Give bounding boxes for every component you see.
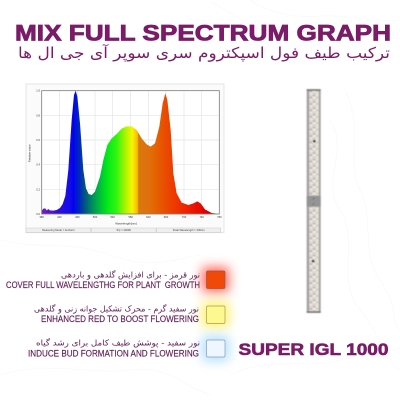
chart footer boxes: Tcp = 4000K xyxy=(116,228,131,232)
legend: red light: COVER FULL WAVELENGTHG FOR PLANT GROWTH xyxy=(6,280,200,290)
x axis labels: 420 xyxy=(57,215,62,219)
y axis title: Relative value xyxy=(28,144,32,162)
legend: red light: نور قرمز - برای افزایش گلدهی و باردهی xyxy=(61,270,200,280)
x axis labels xyxy=(39,215,222,219)
y axis labels: 0.8 xyxy=(36,113,41,117)
x axis labels: 740 xyxy=(199,215,204,219)
product name: SUPER IGL 1000 xyxy=(238,340,388,359)
y axis labels: 0.6 xyxy=(36,138,41,142)
legend: warm white light: نور سفید گرم - محرک تشکیل جوانه زنی و گلدهی xyxy=(34,304,199,314)
chart footer boxes xyxy=(26,228,221,232)
subtitle in Persian: ترکیب طیف فول اسپکتروم سری سوپر آی جی ال ها xyxy=(18,44,390,63)
x axis labels: 580 xyxy=(128,215,133,219)
panel: spectrum chart xyxy=(26,84,224,233)
chart footer boxes: Peak Wavelength = 436nm xyxy=(173,228,205,232)
x axis labels: 780 xyxy=(217,215,222,219)
x axis labels: 540 xyxy=(110,215,115,219)
x axis labels: 700 xyxy=(182,215,187,219)
legend: white light: INDUCE BUD FORMATION AND FLOWERING xyxy=(28,349,199,359)
LED light bar xyxy=(307,89,321,313)
x axis labels: 460 xyxy=(75,215,80,219)
y axis labels xyxy=(36,89,41,216)
y axis labels: 0.0 xyxy=(36,212,41,216)
legend: warm white light xyxy=(34,302,229,327)
chart footer boxes: Measuring Mode = Ambient xyxy=(42,228,75,232)
legend: white light: نور سفید - پوشش طیف کامل برای رشد گیاه xyxy=(36,338,200,348)
x axis labels: 500 xyxy=(93,215,98,219)
x axis labels: 660 xyxy=(164,215,169,219)
spectrum curve xyxy=(42,91,219,214)
legend: warm white light: ENHANCED RED TO BOOST FLOWERING xyxy=(41,314,199,324)
legend: white light xyxy=(28,336,229,361)
x axis title: Wavelength[nm] xyxy=(115,222,137,226)
x axis labels: 380 xyxy=(39,215,44,219)
legend: red light xyxy=(6,267,229,292)
icon: yellow swatch xyxy=(206,306,225,324)
icon: red swatch xyxy=(206,271,225,288)
x axis labels: 620 xyxy=(146,215,151,219)
icon: white swatch xyxy=(206,340,225,357)
y axis labels: 0.2 xyxy=(36,187,41,191)
y axis labels: 0.4 xyxy=(36,163,41,167)
y axis labels: 1.0 xyxy=(36,89,41,93)
title: MIX FULL SPECTRUM GRAPH xyxy=(15,21,391,46)
